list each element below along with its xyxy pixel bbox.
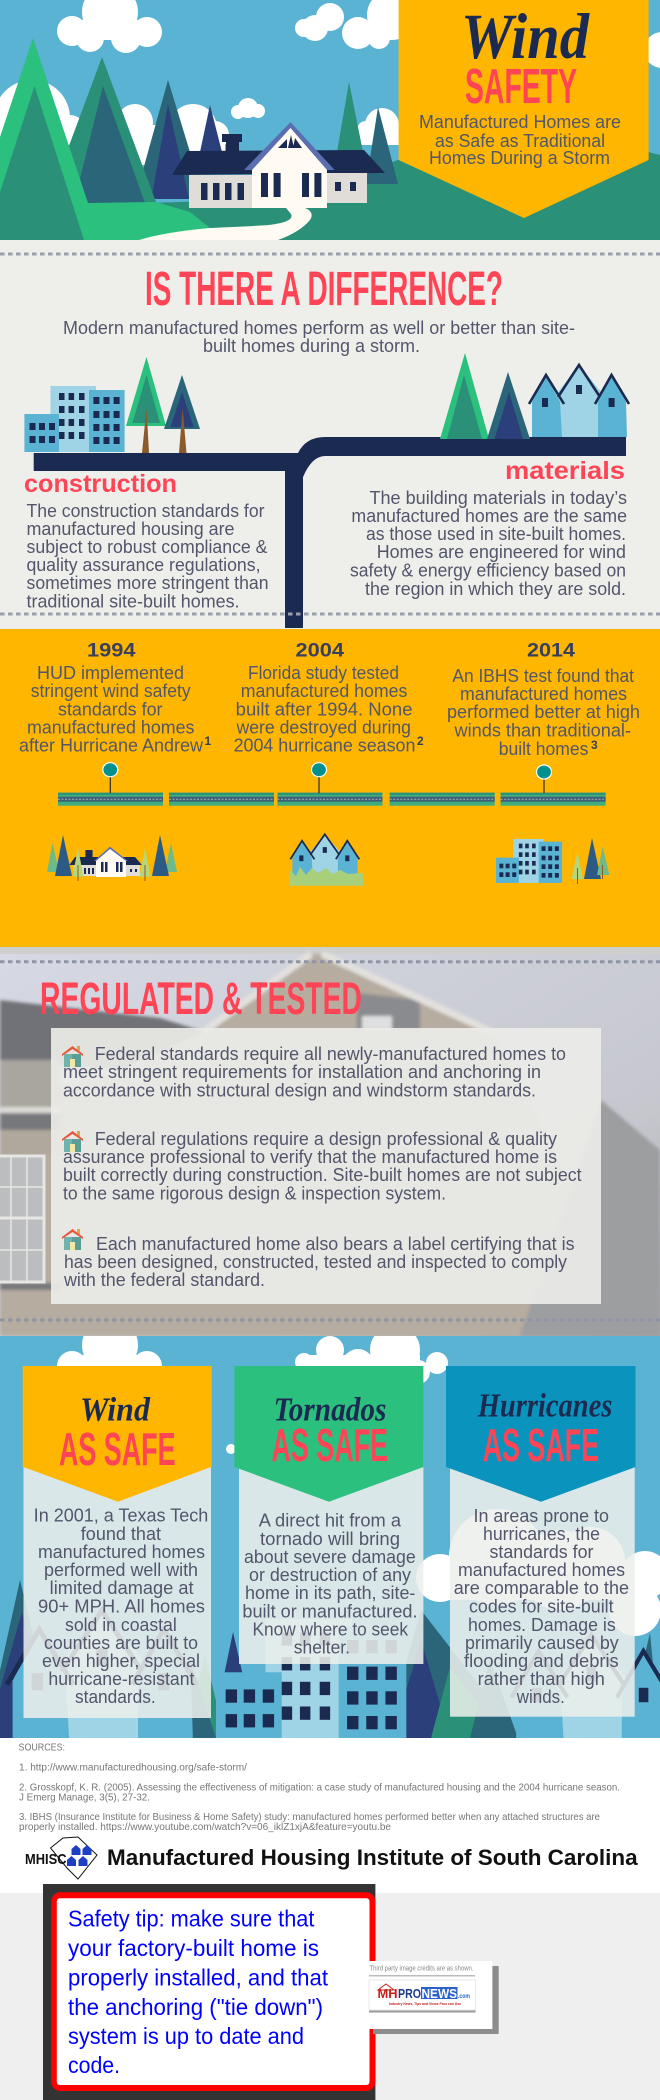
timeline entry 1994: HUD implemented <box>37 663 184 683</box>
construction text: subject to robust compliance & <box>26 537 268 557</box>
card text <box>34 1506 208 1707</box>
hero illustration <box>0 0 660 240</box>
heading: REGULATED & TESTED <box>40 973 362 1024</box>
sources text: J Emerg Manage, 3(5), 27-32. <box>19 1793 150 1804</box>
timeline entry 2004: built after 1994. None <box>236 700 412 720</box>
panel: regulated and tested <box>0 947 660 1336</box>
timeline entry 2004: 2004 <box>296 641 344 662</box>
construction text: sometimes more stringent than <box>26 573 268 593</box>
ground <box>140 152 660 240</box>
icon: trees and houses <box>440 353 629 439</box>
badge: MHProNews image credit: PRO <box>398 1986 421 2001</box>
timeline entry 1994: stringent wind safety <box>31 681 191 701</box>
timeline entry 2004: manufactured homes <box>241 681 407 701</box>
badge: MHProNews image credit: Industry News, Tips and Views Pros can Use <box>389 2001 462 2006</box>
timeline entry 1994 <box>19 641 212 756</box>
tip text: your factory-built home is <box>68 1935 319 1961</box>
paragraph 2: to the same rigorous design & inspection system. <box>63 1184 446 1204</box>
paragraph 1: accordance with structural design and windstorm standards. <box>63 1081 536 1101</box>
intro text: built homes during a storm. <box>203 336 420 356</box>
timeline entry 2004: were destroyed during <box>236 718 411 738</box>
construction text: The construction standards for <box>26 501 265 521</box>
title banner <box>399 0 649 218</box>
subtitle <box>419 112 621 168</box>
timeline entry 1994: 1 <box>204 734 212 748</box>
card text: flooding and debris <box>464 1651 619 1671</box>
text card <box>51 1028 601 1304</box>
card text: limited damage at <box>50 1578 194 1598</box>
paragraph 2: Federal regulations require a design professional & quality <box>95 1129 557 1149</box>
card text: found that <box>81 1524 161 1544</box>
card title: Hurricanes <box>477 1388 612 1425</box>
callout: safety tip <box>43 1884 375 2100</box>
title: Wind: Wind <box>461 1 590 73</box>
icon: house among trees <box>47 835 177 881</box>
timeline entry 2004 <box>234 641 424 756</box>
sources text: 1. http://www.manufacturedhousing.org/safe-storm/ <box>19 1763 247 1774</box>
card text: 90+ MPH. All homes <box>38 1597 205 1617</box>
card text: rather than high <box>478 1669 605 1689</box>
sources text: 2. Grosskopf, K. R. (2005). Assessing the effectiveness of mitigation: a case study of manufactured housing and the 2004 hurricane season. <box>19 1782 620 1793</box>
card text: or destruction of any <box>249 1565 411 1585</box>
tip text: the anchoring ("tie down") <box>68 1994 323 2020</box>
card text: built or manufactured. <box>242 1602 418 1622</box>
materials text: Homes are engineered for wind <box>377 542 626 562</box>
background trees <box>337 82 363 152</box>
timeline entry 1994: manufactured homes <box>27 718 194 738</box>
tip text: code. <box>68 2052 120 2078</box>
timeline entry 2014: built homes <box>499 739 588 759</box>
card: hurricanes <box>446 1366 636 1717</box>
subtitle: Manufactured Homes are <box>419 112 621 132</box>
tip text: system is up to date and <box>68 2023 304 2049</box>
card text: tornado will bring <box>260 1529 400 1549</box>
tip text <box>68 1906 329 2078</box>
card text <box>242 1511 418 1658</box>
materials text: manufactured homes are the same <box>351 506 627 526</box>
paragraph 1 <box>62 1044 566 1101</box>
paragraph 3: Each manufactured home also bears a label certifying that is <box>96 1234 574 1254</box>
institute name: Manufactured Housing Institute of South Carolina <box>107 1845 638 1870</box>
card: wind <box>23 1366 212 1718</box>
paragraph 3 <box>62 1229 574 1290</box>
card banner <box>234 1366 423 1502</box>
card text: even higher, special <box>42 1651 200 1671</box>
photo background <box>0 947 660 1336</box>
card text: about severe damage <box>244 1547 416 1567</box>
card text: sold in coastal <box>65 1615 177 1635</box>
timeline entry 2014: An IBHS test found that <box>452 666 634 686</box>
card text: homes. Damage is <box>468 1615 616 1635</box>
card text: manufactured homes <box>38 1542 205 1562</box>
construction text: quality assurance regulations, <box>26 555 260 575</box>
card banner <box>23 1366 212 1502</box>
construction heading: construction <box>24 470 177 498</box>
card text: shelter. <box>294 1638 350 1658</box>
icon: city and trees <box>496 838 609 884</box>
badge: MHProNews image credit <box>367 1961 499 2034</box>
card text: home in its path, site- <box>245 1583 415 1603</box>
construction text: traditional site-built homes. <box>26 592 240 612</box>
card text: standards. <box>75 1687 156 1707</box>
materials heading: materials <box>505 457 625 485</box>
sources text <box>18 1743 620 1833</box>
tip text: properly installed, and that <box>68 1965 329 1991</box>
badge: MHProNews image credit: NEWS <box>422 1986 457 2001</box>
timeline entry 2014: performed better at high <box>447 702 640 722</box>
paragraph 2: built correctly during construction. Site-built homes are not subject <box>63 1165 582 1185</box>
photo window <box>0 1156 44 1282</box>
timeline entry 2004: Florida study tested <box>248 663 399 683</box>
clouds <box>0 0 660 165</box>
timeline entry 2004: 2 <box>417 734 424 748</box>
intro text: Modern manufactured homes perform as well or better than site- <box>63 318 575 338</box>
timeline entry 2014: 2014 <box>527 641 575 662</box>
road diverging <box>34 437 626 628</box>
timeline pins <box>103 763 552 793</box>
card text: counties are built to <box>44 1633 198 1653</box>
card subtitle: AS SAFE <box>59 1423 176 1475</box>
sources text: 3. IBHS (Insurance Institute for Business & Home Safety) study: manufactured homes performed better when any attached structures are <box>19 1812 600 1823</box>
materials text: The building materials in today’s <box>370 488 627 508</box>
card title: Tornados <box>274 1392 386 1429</box>
card text: In areas prone to <box>474 1506 609 1526</box>
subtitle: as Safe as Traditional <box>435 131 605 151</box>
timeline road <box>58 793 606 806</box>
card text: A direct hit from a <box>259 1511 402 1531</box>
timeline entry 2004: 2004 hurricane season <box>234 736 415 756</box>
card text <box>454 1506 629 1707</box>
timeline entry 2014 <box>447 641 640 759</box>
card text: primarily caused by <box>465 1633 619 1653</box>
timeline entry 1994: 1994 <box>87 641 136 662</box>
card text: are comparable to the <box>454 1578 629 1598</box>
icon: city and trees <box>24 357 200 453</box>
sources text: properly installed. https://www.youtube.com/watch?v=06_iklZ1xjA&feature=youtu.be <box>19 1822 391 1833</box>
badge: MHProNews image credit: .com <box>458 1994 470 2000</box>
sources text: SOURCES: <box>18 1743 65 1754</box>
card text: In 2001, a Texas Tech <box>34 1506 208 1526</box>
card subtitle: AS SAFE <box>272 1419 388 1471</box>
card text: Know where to seek <box>252 1620 409 1640</box>
intro text <box>63 318 575 356</box>
logo: MHISC <box>25 1837 97 1879</box>
construction text <box>26 501 268 612</box>
materials text: safety & energy efficiency based on <box>350 560 626 580</box>
card text: hurricanes, the <box>483 1524 600 1544</box>
construction text: manufactured housing are <box>26 519 234 539</box>
timeline entry 2014: 3 <box>591 738 598 752</box>
timeline entry 1994: standards for <box>58 700 162 720</box>
panel: timeline <box>0 629 660 947</box>
logo: MHISC: MHISC <box>25 1851 67 1868</box>
icon: houses and grass <box>290 834 363 886</box>
house <box>172 122 385 208</box>
paragraph 3: has been designed, constructed, tested and inspected to comply <box>64 1252 567 1272</box>
card text: hurricane-resistant <box>48 1669 194 1689</box>
card text: codes for site-built <box>469 1597 614 1617</box>
materials text <box>350 488 627 599</box>
paragraph 2 <box>62 1129 582 1204</box>
timeline entry 2014: manufactured homes <box>460 684 627 704</box>
card text: manufactured homes <box>458 1560 625 1580</box>
card banner <box>446 1366 636 1502</box>
card text: performed well with <box>44 1560 198 1580</box>
panel: sources <box>0 1738 660 1893</box>
paragraph 2: assurance professional to verify that the manufactured home is <box>63 1147 557 1167</box>
badge: MHProNews image credit: MH <box>378 1986 398 2001</box>
panel: three hazards <box>0 1317 660 1750</box>
subtitle: Homes During a Storm <box>429 148 610 168</box>
panel: is there a difference <box>0 240 660 629</box>
paragraph 1: Federal standards require all newly-manufactured homes to <box>95 1044 566 1064</box>
path <box>139 208 312 240</box>
tip text: Safety tip: make sure that <box>68 1906 315 1932</box>
materials text: as those used in site-built homes. <box>366 524 626 544</box>
paragraph 3: with the federal standard. <box>63 1270 265 1290</box>
card title: Wind <box>80 1392 151 1429</box>
paragraph 1: meet stringent requirements for installation and anchoring in <box>63 1062 541 1082</box>
card: tornados <box>234 1366 423 1664</box>
materials text: the region in which they are sold. <box>365 579 626 599</box>
scene background <box>0 1317 660 1750</box>
card text: standards for <box>490 1542 593 1562</box>
badge: MHProNews image credit: Third party image credits are as shown. <box>370 1966 474 1973</box>
timeline entry 2014: winds than traditional- <box>453 721 631 741</box>
title: Safety: SAFETY <box>465 60 577 114</box>
card text: winds. <box>516 1687 565 1707</box>
timeline entry 1994: after Hurricane Andrew <box>19 736 204 756</box>
